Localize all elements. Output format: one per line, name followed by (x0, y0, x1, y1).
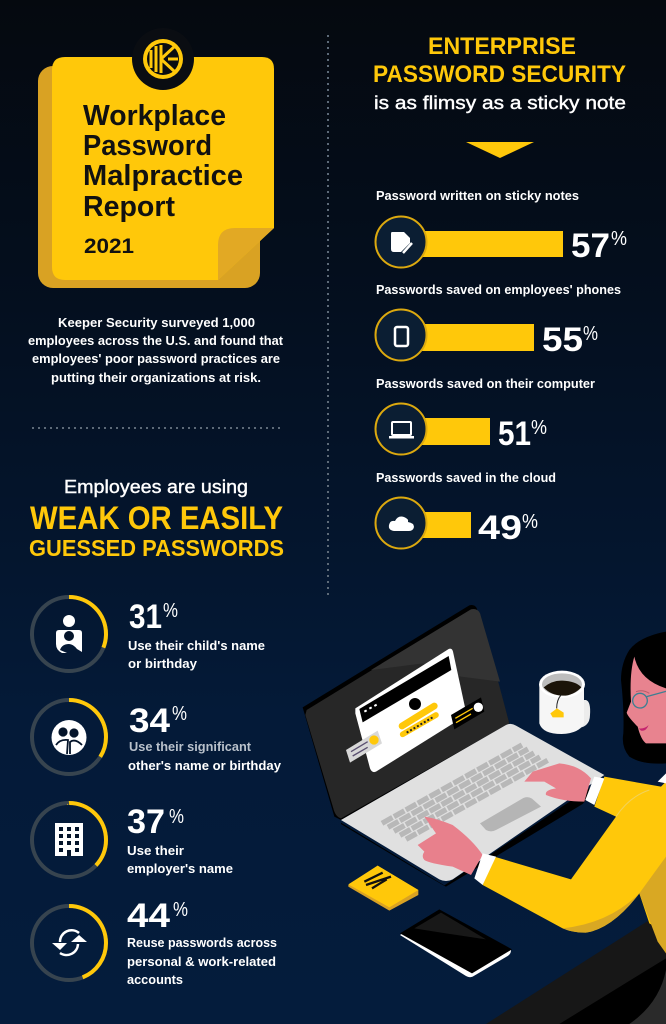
stat: 37% employer's name (32, 803, 233, 877)
laptop base (341, 724, 604, 887)
bar: sticky notes 57%: % (611, 228, 627, 250)
stat: 34% significant other: % (172, 703, 187, 725)
intro text block (28, 316, 284, 385)
stat: 34% significant other: 34 (129, 702, 170, 740)
bar: phones 55%: 55 (542, 321, 583, 359)
stat: 31% child's name: or birthday (128, 657, 197, 671)
year: 2021 (84, 235, 134, 258)
heading: enterprise password security: PASSWORD SECURITY (373, 61, 626, 88)
woman (418, 632, 666, 953)
stat: 44% reuse passwords: Reuse passwords across (127, 936, 277, 950)
title: Workplace (83, 100, 226, 132)
title: Report (83, 191, 175, 223)
bar: sticky notes 57%: 57 (571, 227, 610, 265)
heading: weak passwords: WEAK OR EASILY (30, 500, 283, 536)
stat: 34% significant other: other's name or birthday (128, 759, 281, 773)
stat: 37% employer's name: 37 (127, 803, 165, 841)
heading: enterprise password security: ENTERPRISE (428, 33, 576, 60)
intro text block: employees across the U.S. and found that (28, 334, 284, 348)
heading: weak passwords: Employees are using (64, 476, 248, 497)
stat: 37% employer's name: Use their (127, 844, 184, 858)
title: Password (83, 130, 212, 162)
shirt cuffs (474, 777, 604, 885)
stat: 44% reuse passwords: % (173, 899, 188, 921)
intro text block: employees' poor password practices are (32, 352, 280, 366)
heading: weak passwords: GUESSED PASSWORDS (29, 535, 284, 561)
stat: 44% reuse passwords: accounts (127, 973, 183, 987)
bar: cloud 49%: % (522, 511, 538, 533)
heading: enterprise password security: is as flimsy as a sticky note (374, 93, 626, 113)
stat: 44% reuse passwords: 44 (127, 897, 170, 935)
panel: weak password stats (32, 597, 281, 987)
stat: 34% significant other (32, 700, 281, 774)
intro text block: putting their organizations at risk. (51, 371, 261, 385)
intro text block: Keeper Security surveyed 1,000 (58, 316, 255, 330)
stat: 31% child's name: % (163, 600, 178, 622)
bar: computer 51%: Passwords saved on their computer (376, 377, 595, 391)
bar: cloud 49%: 49 (478, 509, 522, 547)
title (83, 100, 243, 223)
sticky note pad (348, 866, 418, 911)
phone (400, 909, 512, 977)
stat: 31% child's name: Use their child's name (128, 639, 265, 653)
bar: computer 51%: % (531, 417, 547, 439)
stat: 44% reuse passwords: personal & work-related (127, 955, 276, 969)
bar: computer 51%: 51 (498, 415, 531, 453)
chair (486, 920, 666, 1024)
laptop screen (303, 605, 509, 820)
laptop (303, 605, 604, 887)
heading: weak passwords (29, 476, 284, 561)
bar: sticky notes 57%: Password written on sticky notes (376, 189, 579, 203)
illustration: woman at laptop (303, 605, 666, 1024)
heading: enterprise password security (373, 33, 626, 113)
title: Malpractice (83, 160, 243, 192)
stat: 31% child's name: 31 (129, 598, 162, 636)
bar: cloud 49%: Passwords saved in the cloud (376, 471, 556, 485)
face (627, 657, 666, 743)
bar: phones 55%: Passwords saved on employees' phones (376, 283, 621, 297)
stat: 31% child's name (32, 597, 265, 671)
bar chart: password storage (376, 189, 627, 548)
stat: 34% significant other: Use their significant (129, 740, 252, 754)
bar: computer 51% (376, 377, 595, 454)
keyboard (382, 745, 548, 839)
bar: phones 55% (376, 283, 621, 360)
bar: sticky notes 57% (376, 189, 627, 268)
arrow: down triangle (466, 142, 534, 158)
stat: 37% employer's name: % (169, 806, 184, 828)
bar: cloud 49% (376, 471, 556, 548)
stat: 44% reuse passwords (32, 897, 277, 987)
touchpad (480, 797, 541, 831)
torso and arms (483, 773, 666, 953)
bar: phones 55%: % (583, 323, 598, 345)
icon: keeper logo (132, 28, 194, 90)
coffee mug (539, 671, 590, 734)
stat: 37% employer's name: employer's name (127, 862, 233, 876)
hair (621, 632, 666, 764)
hands (418, 763, 591, 875)
sticky note shape (38, 57, 274, 288)
panel: sticky note report cover (38, 28, 274, 288)
